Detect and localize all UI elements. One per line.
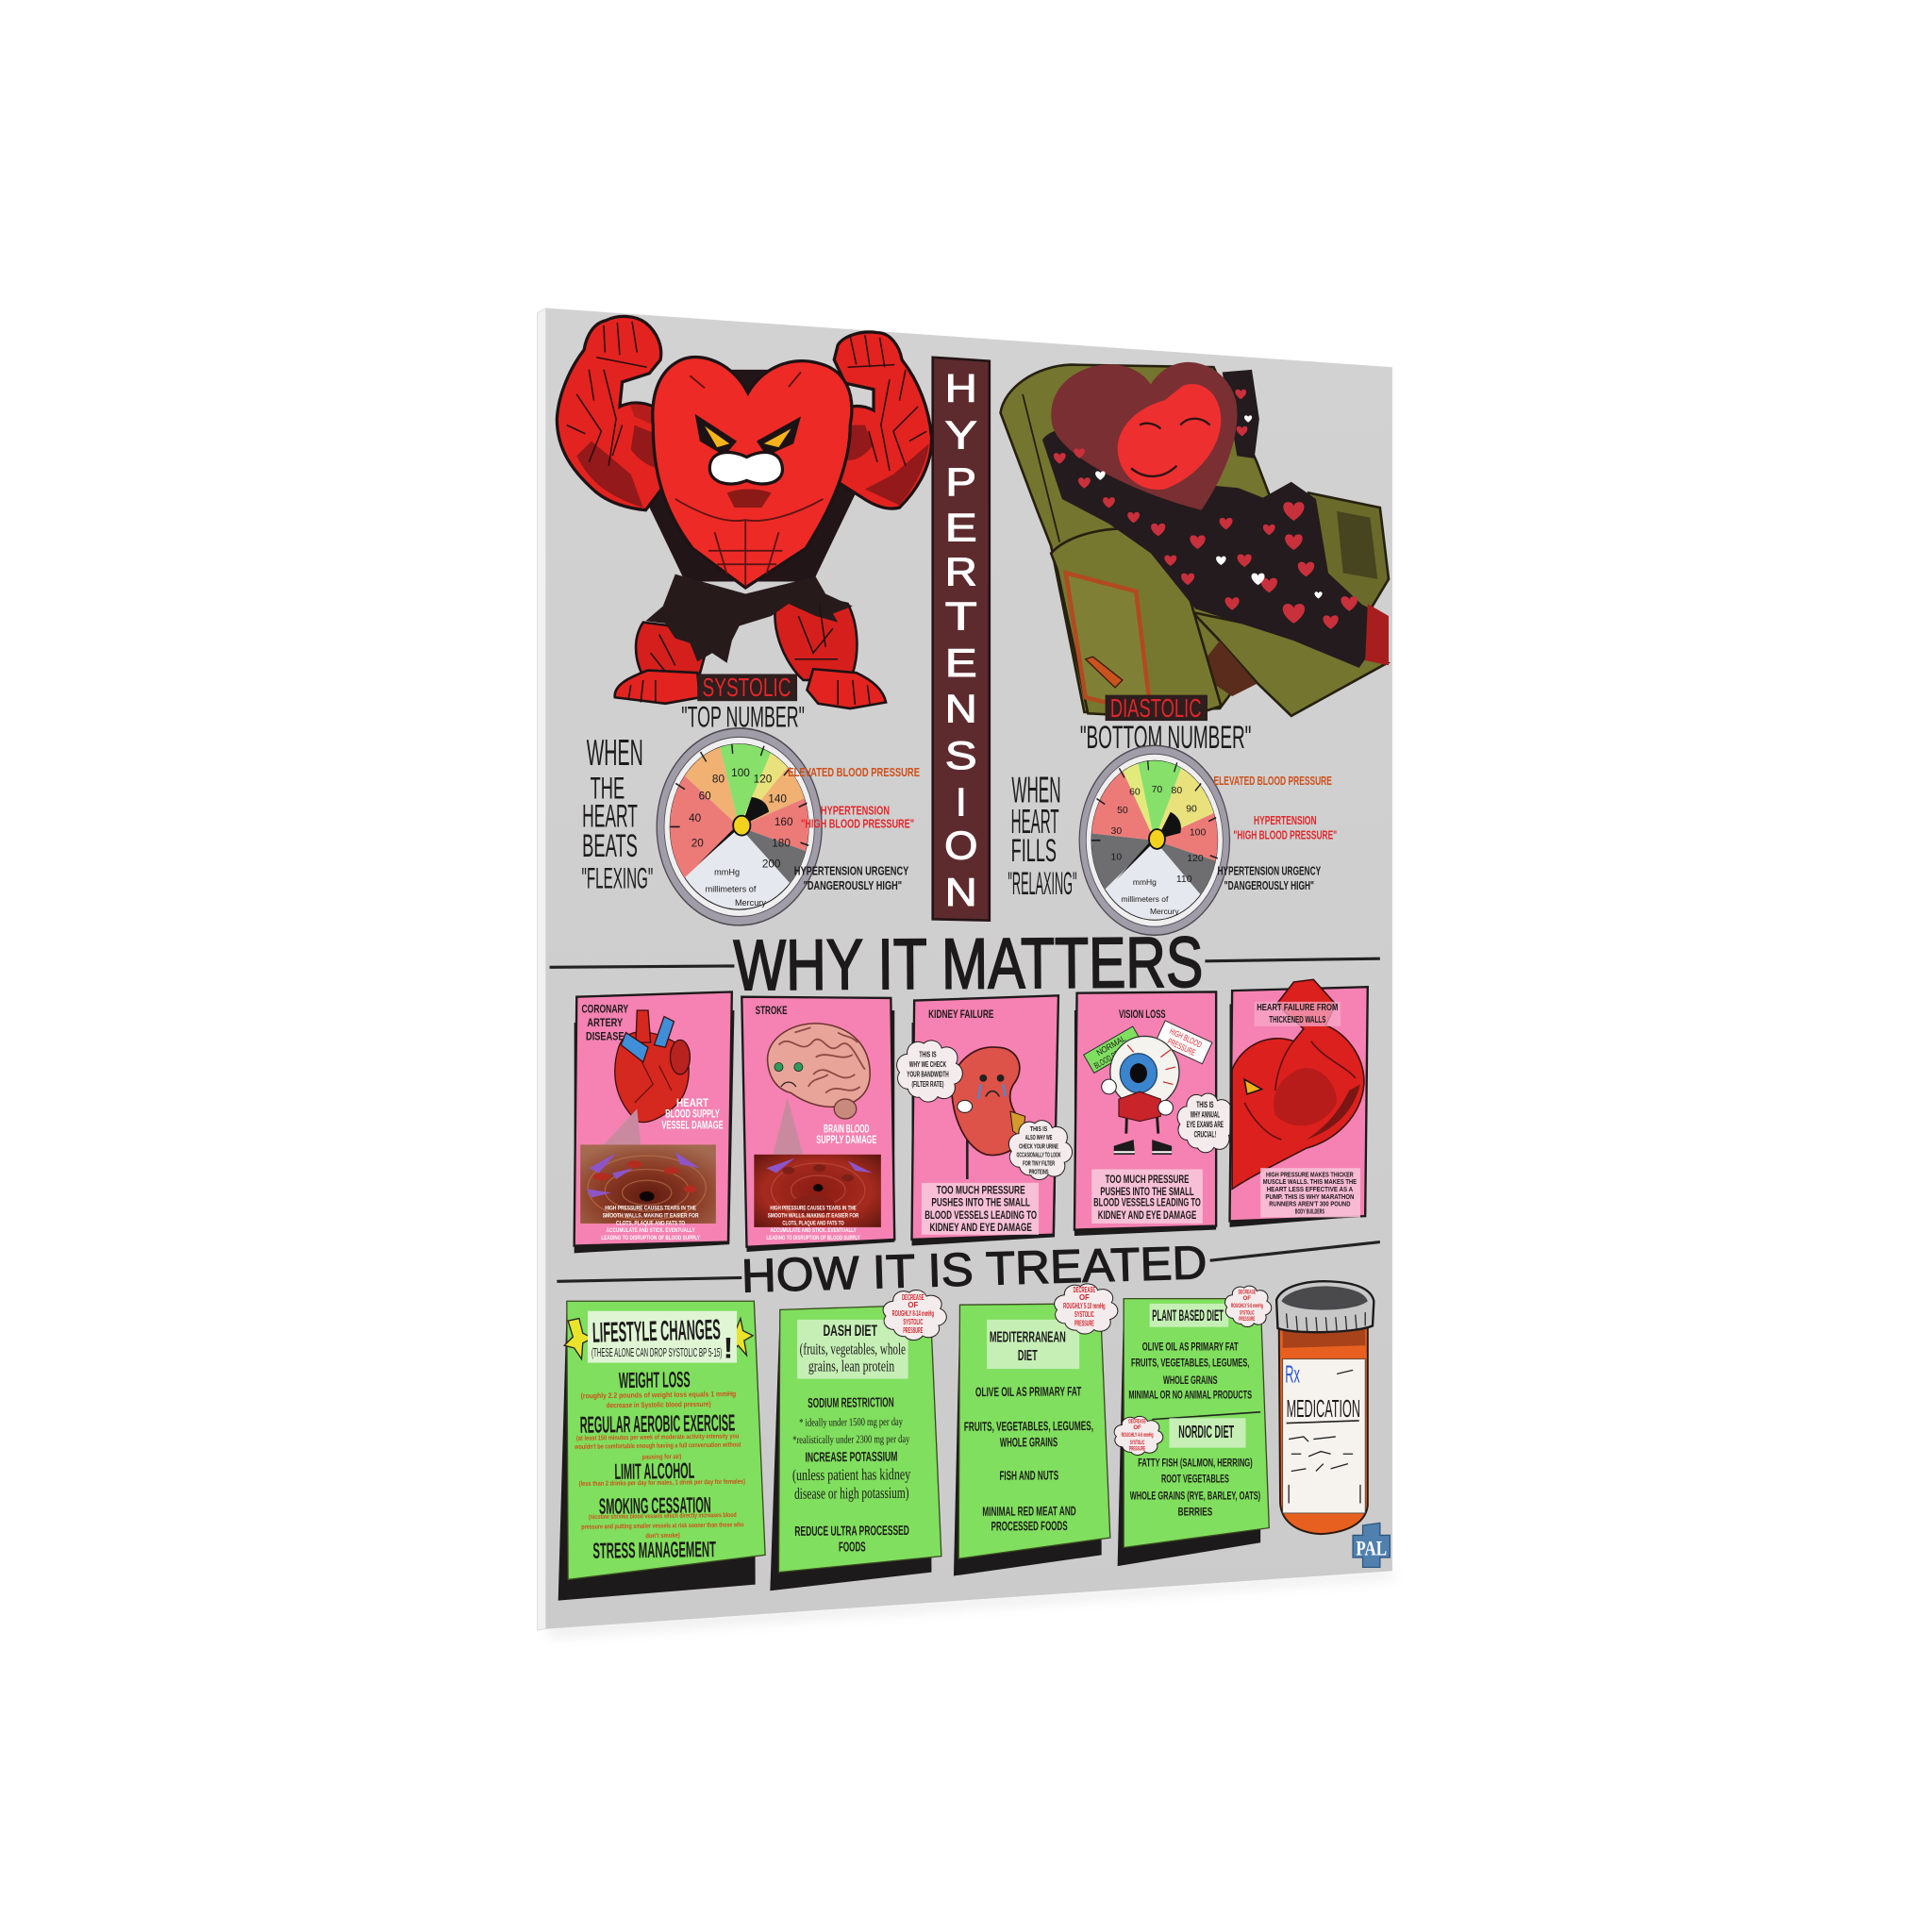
speech bubble: annual eye exams: WHY ANNUAL <box>1191 1110 1220 1120</box>
face: brows and eyes <box>695 414 737 456</box>
title banner: HYPERTENSION: I <box>956 780 967 824</box>
logo: PAL cross <box>1353 1523 1390 1567</box>
legend: diastolic ranges: ELEVATED BLOOD PRESSURE <box>1214 774 1332 788</box>
cloud: mediterranean systolic drop: DECREASE <box>1074 1286 1095 1294</box>
right flexing arm <box>825 332 932 508</box>
heart head <box>1051 362 1237 510</box>
cloud: mediterranean systolic drop: ROUGHLY 5-10 mmHg <box>1063 1302 1106 1310</box>
label: vessel damage: HEART <box>676 1097 709 1109</box>
caption box: KIDNEY AND EYE DAMAGE <box>929 1222 1032 1234</box>
magnification cone <box>604 1109 641 1144</box>
panel: coronary artery disease <box>575 991 734 1253</box>
text: "RELAXING" <box>1008 866 1077 902</box>
cloud: plant based systolic drop: ROUGHLY 5-8 mmHg <box>1231 1304 1263 1309</box>
diastolic unit note: mmHg <box>1133 877 1157 887</box>
hulk torso back <box>640 370 858 581</box>
label: brain blood supply damage <box>816 1123 876 1146</box>
systolic needle <box>697 797 769 865</box>
list: mediterranean items: FRUITS, VEGETABLES, LEGUMES, <box>964 1419 1093 1434</box>
speech bubble: urine: PROTEINS <box>1029 1169 1049 1176</box>
arm shading <box>576 404 929 508</box>
recliner side panel <box>1066 573 1151 713</box>
list: lifestyle items: STRESS MANAGEMENT <box>592 1537 716 1563</box>
pajama hearts <box>1054 390 1357 629</box>
list: mediterranean items: PROCESSED FOODS <box>991 1519 1068 1533</box>
label: brain blood supply damage: BRAIN BLOOD <box>824 1123 869 1135</box>
panel: vision loss <box>1074 991 1236 1236</box>
recliner front arm <box>1051 528 1221 718</box>
panel: lifestyle changes <box>558 1301 765 1601</box>
label: vessel damage: BLOOD SUPPLY <box>665 1108 720 1121</box>
box: lifestyle heading <box>588 1311 737 1364</box>
title box <box>1255 1002 1341 1026</box>
title box: HEART FAILURE FROM <box>1257 1003 1338 1013</box>
recliner back <box>1001 365 1306 712</box>
box: mediterranean heading: DIET <box>1018 1348 1038 1364</box>
box: dash heading: (fruits, vegetables, whole <box>800 1340 906 1357</box>
list: plant based items: WHOLE GRAINS <box>1163 1374 1217 1387</box>
diastolic scale numbers: 80 <box>1172 786 1182 796</box>
box: lifestyle heading: ! <box>724 1331 733 1364</box>
illustration: relaxed diastolic heart in recliner <box>1001 362 1389 718</box>
text: when heart fills relaxing <box>1008 770 1077 902</box>
caption box: MUSCLE WALLS. THIS MAKES THE <box>1263 1178 1357 1186</box>
systolic scale numbers: 200 <box>762 858 781 871</box>
label: vessel damage <box>661 1097 724 1131</box>
panel: kidney failure: KIDNEY FAILURE <box>928 1008 993 1021</box>
systolic unit note: millimeters of <box>706 885 757 894</box>
list: lifestyle items: LIMIT ALCOHOL <box>614 1458 694 1484</box>
label: vessel damage: VESSEL DAMAGE <box>661 1119 724 1131</box>
red foot <box>1365 604 1389 665</box>
speech bubble: annual eye exams: CRUCIAL! <box>1194 1130 1216 1140</box>
caption box <box>922 1183 1039 1235</box>
cloud: dash systolic drop: SYSTOLIC <box>903 1318 923 1326</box>
caption box: PUSHES INTO THE SMALL <box>931 1197 1030 1209</box>
recliner footrest <box>1192 612 1388 716</box>
speech bubble: annual eye exams <box>1177 1093 1236 1153</box>
diastolic scale numbers: 120 <box>1187 854 1204 864</box>
caption box <box>1091 1170 1203 1224</box>
magnification cone <box>773 1098 804 1156</box>
left flexing arm <box>557 316 675 510</box>
list: dash items: *realistically under 2300 mg per day <box>792 1433 909 1446</box>
box: lifestyle heading: (THESE ALONE CAN DROP SYSTOLIC BP 5-15) <box>591 1345 722 1359</box>
systolic scale numbers: 20 <box>691 837 704 849</box>
panel title <box>581 1004 628 1042</box>
list: nordic items: ROOT VEGETABLES <box>1161 1472 1229 1485</box>
recliner right arm <box>1308 492 1389 610</box>
micro view: damaged brain vessel <box>754 1155 881 1227</box>
heading: how it is treated <box>557 1236 1380 1303</box>
caption: CLOTS, PLAQUE AND FATS TO <box>616 1220 685 1226</box>
poster background <box>537 308 1395 1637</box>
caption box: HIGH PRESSURE MAKES THICKER <box>1266 1171 1354 1178</box>
diastolic scale numbers <box>1111 785 1206 885</box>
label: systolic top number: "TOP NUMBER" <box>681 701 805 734</box>
caption box: BLOOD VESSELS LEADING TO <box>924 1209 1037 1222</box>
icon: sad brain <box>768 1024 870 1119</box>
caption: ACCUMULATE AND STICK. EVENTUALLY <box>607 1227 695 1234</box>
cloud: mediterranean systolic drop: PRESSURE <box>1074 1319 1094 1327</box>
panel: heart failure from thickened walls <box>1230 979 1368 1227</box>
cloud: plant based systolic drop: OF <box>1243 1296 1251 1302</box>
title banner: HYPERTENSION: R <box>945 549 977 593</box>
list: dash items: disease or high potassium) <box>794 1484 909 1503</box>
caption: LEADING TO DISRUPTION OF BLOOD SUPPLY <box>766 1235 860 1241</box>
list: lifestyle items: wouldn't be comfortable enough having a full conversation without <box>574 1441 741 1451</box>
legend: diastolic ranges: HYPERTENSION URGENCY <box>1217 863 1321 877</box>
legend: diastolic ranges: "DANGEROUSLY HIGH" <box>1224 878 1314 892</box>
panel: dash diet <box>770 1291 946 1591</box>
text: when the heart beats flexing: THE <box>591 770 625 805</box>
caption box: PUSHES INTO THE SMALL <box>1100 1186 1194 1198</box>
speech bubble: bandwidth: WHY WE CHECK <box>909 1059 947 1069</box>
sign: high blood pressure: PRESSURE <box>1166 1037 1197 1058</box>
caption box: BODY BUILDERS <box>1295 1208 1324 1216</box>
cloud: nordic systolic drop <box>1114 1416 1163 1455</box>
panel: stroke: STROKE <box>756 1005 788 1017</box>
systolic scale numbers: 140 <box>768 792 787 805</box>
speech bubble: urine <box>1008 1121 1073 1179</box>
panel: kidney failure <box>897 995 1073 1245</box>
logo: PAL cross: PAL <box>1356 1536 1387 1559</box>
cloud: plant based systolic drop: DECREASE <box>1239 1290 1256 1295</box>
heading: why it matters: WHY IT MATTERS <box>733 923 1204 1006</box>
cloud: nordic systolic drop: SYSTOLIC <box>1130 1441 1145 1446</box>
recliner lever <box>1086 657 1123 688</box>
list: mediterranean items <box>964 1384 1094 1534</box>
list: nordic items: WHOLE GRAINS (RYE, BARLEY, OATS) <box>1130 1490 1260 1503</box>
speech bubble: urine: OCCASIONALLY TO LOOK <box>1017 1151 1061 1158</box>
text: when heart fills relaxing: HEART <box>1011 802 1059 841</box>
list: lifestyle items: WEIGHT LOSS <box>619 1367 691 1392</box>
list: plant based items <box>1128 1341 1252 1401</box>
legend: systolic ranges <box>788 765 920 892</box>
pecs and abs <box>675 372 823 587</box>
label: systolic top number <box>681 673 805 734</box>
list: nordic items: BERRIES <box>1178 1506 1212 1519</box>
heading: how it is treated: HOW IT IS TREATED <box>741 1236 1208 1303</box>
title banner: HYPERTENSION: H <box>945 366 977 410</box>
face: mouth <box>709 452 782 484</box>
sign: high blood pressure <box>1156 1021 1212 1064</box>
box: dash heading: DASH DIET <box>823 1322 877 1340</box>
speech bubble: urine: CHECK YOUR URINE <box>1019 1142 1058 1150</box>
panel: lifestyle changes: REGULAR AEROBIC EXERCISE <box>580 1411 736 1439</box>
legend: systolic ranges: HYPERTENSION <box>821 803 890 817</box>
text: when the heart beats flexing: BEATS <box>582 828 638 864</box>
legend: systolic ranges: "HIGH BLOOD PRESSURE" <box>801 817 914 831</box>
speech bubble: bandwidth: THIS IS <box>919 1050 937 1059</box>
speech bubble: annual eye exams: THIS IS <box>1196 1100 1214 1109</box>
caption box: TOO MUCH PRESSURE <box>1106 1174 1190 1186</box>
cloud: dash systolic drop: OF <box>908 1301 918 1309</box>
prescription label: Rx <box>1285 1359 1300 1388</box>
diastolic scale numbers: 110 <box>1176 874 1192 885</box>
text: when the heart beats flexing: WHEN <box>587 733 643 774</box>
systolic unit note: mmHg <box>714 867 740 876</box>
caption box: RUNNERS AREN'T 300 POUND <box>1269 1201 1351 1208</box>
cloud: nordic systolic drop: DECREASE <box>1128 1420 1146 1425</box>
diastolic needle <box>1116 812 1181 880</box>
legend: diastolic ranges: "HIGH BLOOD PRESSURE" <box>1233 827 1337 841</box>
title banner: HYPERTENSION: Y <box>945 412 977 457</box>
list: dash items: INCREASE POTASSIUM <box>805 1450 897 1465</box>
caption box: BLOOD VESSELS LEADING TO <box>1093 1197 1201 1209</box>
diastolic scale numbers: 90 <box>1186 805 1197 815</box>
caption: SMOOTH WALLS, MAKING IT EASIER FOR <box>603 1212 699 1219</box>
legend: systolic ranges: ELEVATED BLOOD PRESSURE <box>788 765 920 779</box>
systolic scale numbers: 180 <box>772 837 791 849</box>
cloud: mediterranean systolic drop: OF <box>1079 1293 1090 1302</box>
panel: stroke <box>741 997 894 1252</box>
gauge: systolic <box>657 728 822 925</box>
speech bubble: annual eye exams: EYE EXAMS ARE <box>1187 1120 1224 1129</box>
cloud: nordic systolic drop: PRESSURE <box>1129 1446 1145 1452</box>
legend: diastolic ranges: HYPERTENSION <box>1254 813 1317 827</box>
label: systolic top number: SYSTOLIC <box>702 673 791 702</box>
systolic unit note: Mercury <box>735 898 766 908</box>
title banner: HYPERTENSION: N <box>945 686 977 730</box>
label: brain blood supply damage: SUPPLY DAMAGE <box>816 1134 876 1146</box>
sign: normal blood pressure: NORMAL <box>1095 1034 1127 1058</box>
box: nordic heading: NORDIC DIET <box>1178 1422 1234 1441</box>
box: plant based heading <box>1150 1304 1228 1327</box>
systolic unit note <box>706 867 766 908</box>
prescription label <box>1283 1359 1365 1513</box>
list: plant based items: MINIMAL OR NO ANIMAL PRODUCTS <box>1128 1388 1252 1401</box>
list: lifestyle items: (roughly 2.2 pounds of weight loss equals 1 mmHg <box>581 1390 736 1400</box>
box: mediterranean heading <box>987 1320 1079 1369</box>
systolic scale numbers: 40 <box>689 812 702 824</box>
bottle cap <box>1276 1281 1374 1332</box>
list: dash items: * ideally under 1500 mg per day <box>799 1416 903 1429</box>
systolic scale numbers: 60 <box>699 791 711 803</box>
sign: high blood pressure: HIGH BLOOD <box>1168 1026 1204 1050</box>
panel: plant based and nordic diets <box>1114 1286 1272 1566</box>
list: lifestyle items: (nicotine shrinks blood vessels which directly increases blood <box>589 1511 737 1521</box>
legs <box>774 589 857 680</box>
cloud: mediterranean systolic drop: SYSTOLIC <box>1074 1310 1094 1319</box>
list: nordic items <box>1130 1456 1260 1519</box>
list: mediterranean items: FISH AND NUTS <box>999 1468 1058 1483</box>
feet <box>615 671 700 704</box>
icon: crying kidney with cane <box>952 1047 1025 1179</box>
list: mediterranean items: OLIVE OIL AS PRIMARY FAT <box>975 1384 1082 1399</box>
cloud: dash systolic drop: ROUGHLY 8-14 mmHg <box>892 1309 934 1318</box>
caption: CLOTS, PLAQUE AND FATS TO <box>782 1220 844 1226</box>
text: when the heart beats flexing: HEART <box>582 798 638 834</box>
panel: plant based and nordic diets: PLANT BASED DIET <box>1152 1307 1224 1324</box>
cloud: plant based systolic drop <box>1225 1286 1272 1327</box>
label: diastolic bottom number: DIASTOLIC <box>1110 693 1201 723</box>
star left <box>564 1319 592 1359</box>
caption <box>766 1206 860 1241</box>
smile and closed eyes <box>1131 419 1210 476</box>
list: lifestyle items: don't smoke) <box>645 1532 680 1540</box>
title banner: HYPERTENSION: O <box>944 823 977 867</box>
caption box: HEART LESS EFFECTIVE AS A <box>1267 1186 1353 1193</box>
cloud: plant based systolic drop: PRESSURE <box>1239 1317 1255 1323</box>
text: "FLEXING" <box>581 862 653 895</box>
diastolic unit note <box>1121 877 1179 916</box>
icon: eyeball character <box>1102 1036 1179 1155</box>
caption box: KIDNEY AND EYE DAMAGE <box>1098 1209 1196 1222</box>
box: dash heading: grains, lean protein <box>808 1357 895 1375</box>
gauge: diastolic <box>1079 745 1230 935</box>
speech bubble: bandwidth <box>897 1041 962 1102</box>
speech bubble: bandwidth: (FILTER RATE) <box>912 1079 944 1089</box>
caption: ACCUMULATE AND STICK. EVENTUALLY <box>770 1227 857 1234</box>
diastolic scale numbers: 10 <box>1111 853 1122 863</box>
cloud: dash systolic drop: DECREASE <box>902 1293 924 1302</box>
list: lifestyle items: (less than 2 drinks per day for males, 1 drink per day for females) <box>579 1478 746 1488</box>
title banner: HYPERTENSION <box>933 358 990 921</box>
systolic scale numbers: 120 <box>754 773 773 785</box>
systolic scale numbers: 160 <box>774 816 793 828</box>
heart body <box>653 358 852 588</box>
box: nordic heading <box>1170 1418 1245 1448</box>
panel title: DISEASE <box>586 1030 625 1042</box>
label: diastolic bottom number: "BOTTOM NUMBER" <box>1080 720 1251 756</box>
panel: mediterranean diet <box>954 1284 1118 1576</box>
caption: LEADING TO DISRUPTION OF BLOOD SUPPLY <box>601 1235 700 1241</box>
bottle body <box>1279 1325 1368 1534</box>
list: dash items: SODIUM RESTRICTION <box>808 1395 894 1411</box>
cloud: dash systolic drop <box>883 1291 946 1341</box>
legend: systolic ranges: HYPERTENSION URGENCY <box>794 863 908 877</box>
label: diastolic bottom number <box>1080 693 1251 756</box>
box: mediterranean heading: MEDITERRANEAN <box>990 1329 1066 1345</box>
list: plant based items: OLIVE OIL AS PRIMARY FAT <box>1142 1341 1239 1354</box>
caption <box>601 1206 700 1241</box>
panel: lifestyle changes: LIFESTYLE CHANGES <box>592 1314 721 1349</box>
caption box <box>1260 1168 1360 1217</box>
title banner: HYPERTENSION: E <box>945 505 977 549</box>
caption box: PUMP. THIS IS WHY MARATHON <box>1265 1193 1354 1201</box>
pajama body and legs <box>1042 429 1388 668</box>
list: dash items: REDUCE ULTRA PROCESSED <box>794 1524 909 1540</box>
list: nordic items: FATTY FISH (SALMON, HERRING) <box>1138 1456 1253 1469</box>
sign: normal blood pressure: BLOOD PRESSURE <box>1092 1038 1140 1071</box>
micro view: damaged artery <box>580 1144 716 1224</box>
speech bubble: urine: FOR TINY FILTER <box>1023 1160 1056 1168</box>
list: mediterranean items: MINIMAL RED MEAT AND <box>982 1504 1076 1519</box>
shorts <box>645 575 853 663</box>
heart face <box>1118 384 1221 490</box>
title banner: HYPERTENSION: S <box>945 733 977 777</box>
list: lifestyle items: pausing for air) <box>641 1453 682 1461</box>
title banner: HYPERTENSION: T <box>945 593 977 638</box>
list: mediterranean items: WHOLE GRAINS <box>1000 1435 1058 1450</box>
icon: anatomical heart <box>615 1010 690 1123</box>
caption: HIGH PRESSURE CAUSES TEARS IN THE <box>605 1206 696 1212</box>
systolic scale numbers <box>689 767 793 871</box>
caption: SMOOTH WALLS, MAKING IT EASIER FOR <box>768 1212 859 1219</box>
sign: normal blood pressure <box>1084 1026 1143 1073</box>
cloud: dash systolic drop: PRESSURE <box>903 1326 923 1335</box>
illustration: muscular systolic heart <box>557 316 932 708</box>
list: dash items <box>791 1395 911 1556</box>
cloud: mediterranean systolic drop <box>1055 1284 1118 1334</box>
systolic scale numbers: 100 <box>731 767 750 779</box>
legend: diastolic ranges <box>1214 774 1337 892</box>
diastolic scale numbers: 30 <box>1111 826 1122 837</box>
title banner: HYPERTENSION: N <box>945 870 977 914</box>
diastolic scale numbers: 60 <box>1129 787 1141 797</box>
prescription label: MEDICATION <box>1287 1394 1360 1423</box>
text: when the heart beats flexing <box>581 733 653 895</box>
list: dash items: (unless patient has kidney <box>792 1465 911 1484</box>
diastolic scale numbers: 100 <box>1190 828 1206 839</box>
cloud: nordic systolic drop: OF <box>1133 1425 1141 1431</box>
list: lifestyle items: decrease in Systolic blood pressure) <box>606 1400 711 1409</box>
star right <box>724 1319 753 1356</box>
text: when heart fills relaxing: WHEN <box>1011 770 1061 810</box>
caption box: TOO MUCH PRESSURE <box>937 1185 1025 1197</box>
list: lifestyle items: SMOKING CESSATION <box>599 1492 711 1519</box>
title banner: HYPERTENSION: P <box>945 459 976 504</box>
panel: vision loss: VISION LOSS <box>1119 1008 1166 1021</box>
panel title: CORONARY <box>581 1004 628 1016</box>
cloud: nordic systolic drop: ROUGHLY 4-6 mmHg <box>1122 1433 1154 1439</box>
speech bubble: urine: THIS IS <box>1030 1125 1047 1133</box>
systolic scale numbers: 80 <box>712 773 724 785</box>
icon: thickened muscle heart <box>1232 979 1364 1189</box>
list: lifestyle items <box>573 1366 747 1563</box>
box: dash heading <box>797 1320 908 1379</box>
diastolic unit note: millimeters of <box>1121 894 1169 904</box>
diastolic unit note: Mercury <box>1150 907 1179 916</box>
diastolic scale numbers: 50 <box>1117 806 1128 816</box>
list: dash items: FOODS <box>839 1540 866 1556</box>
title banner: HYPERTENSION: E <box>945 641 977 685</box>
text: when heart fills relaxing: FILLS <box>1011 833 1057 869</box>
panel title: ARTERY <box>587 1017 623 1029</box>
diastolic scale numbers: 70 <box>1152 785 1162 795</box>
list: lifestyle items: pressure and putting smaller vessels at risk sooner than those who <box>581 1521 744 1531</box>
cloud: plant based systolic drop: SYSTOLIC <box>1240 1311 1255 1317</box>
caption: HIGH PRESSURE CAUSES TEARS IN THE <box>770 1206 857 1212</box>
icon: medication bottle <box>1276 1281 1374 1534</box>
speech bubble: bandwidth: YOUR BANDWIDTH <box>907 1070 949 1079</box>
list: plant based items: FRUITS, VEGETABLES, LEGUMES, <box>1131 1356 1249 1369</box>
legend: systolic ranges: "DANGEROUSLY HIGH" <box>804 878 902 892</box>
speech bubble: urine: ALSO WHY WE <box>1025 1134 1053 1141</box>
list: lifestyle items: (at least 150 minutes per week of moderate activity-intensity you <box>576 1432 739 1442</box>
title box: THICKENED WALLS <box>1269 1015 1325 1025</box>
